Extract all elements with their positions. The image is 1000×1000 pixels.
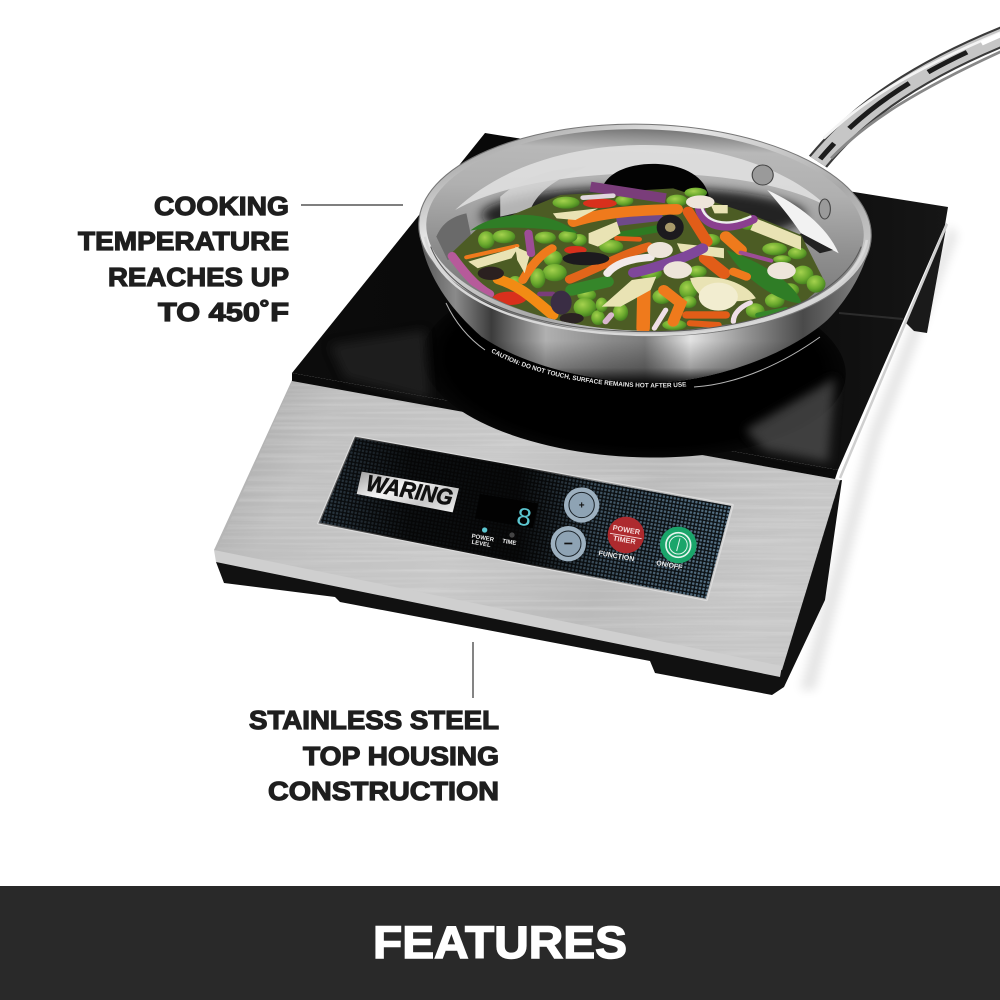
black base and feet bbox=[216, 480, 842, 695]
label: cooking temperature bbox=[78, 191, 403, 327]
burner disk bbox=[417, 262, 851, 468]
purple onion back bbox=[590, 187, 666, 198]
purple onion strips bbox=[452, 196, 771, 328]
display: 8 bbox=[514, 502, 534, 535]
orange strips bbox=[466, 209, 747, 328]
mushrooms bbox=[647, 195, 796, 279]
footer title: FEATURES bbox=[373, 917, 627, 968]
rivets bbox=[752, 165, 830, 219]
pale yellow vegetables bbox=[468, 205, 801, 311]
olives bbox=[478, 215, 684, 324]
glass front edge bbox=[292, 373, 838, 479]
label: stainless steel: CONSTRUCTION bbox=[268, 776, 499, 806]
induction cooktop bbox=[210, 133, 958, 695]
frying pan with vegetables bbox=[415, 25, 1000, 383]
red pepper bbox=[493, 199, 617, 305]
glass seam bbox=[839, 313, 903, 319]
panel plate bbox=[318, 437, 733, 600]
plus button bbox=[564, 487, 599, 523]
label: stainless steel: STAINLESS STEEL bbox=[249, 705, 499, 735]
soft shadow bbox=[800, 225, 958, 690]
footer banner bbox=[0, 886, 1000, 1000]
on off label: ON/OFF bbox=[656, 560, 684, 572]
stainless steel top bbox=[214, 380, 840, 670]
caution text: CAUTION: DO NOT TOUCH, SURFACE REMAINS HOT AFTER USE bbox=[492, 349, 686, 388]
power timer button: POWER bbox=[612, 523, 642, 537]
label: cooking temperature: REACHES UP bbox=[108, 262, 289, 292]
label: cooking temperature: COOKING bbox=[154, 191, 289, 221]
display bbox=[475, 494, 538, 535]
indicator labels bbox=[471, 534, 517, 549]
reflection on glass right bbox=[745, 378, 835, 462]
label: cooking temperature: TEMPERATURE bbox=[78, 226, 289, 256]
indicator labels: LEVEL bbox=[471, 540, 491, 549]
inner wall bbox=[422, 123, 868, 337]
power timer button: TIMER bbox=[612, 533, 637, 546]
Waring logo: WARING bbox=[364, 470, 455, 510]
indicator labels: POWER bbox=[471, 534, 495, 544]
leader line bbox=[472, 642, 474, 698]
label: stainless steel bbox=[249, 642, 499, 806]
green beans bbox=[572, 228, 786, 315]
steel front lip bbox=[214, 550, 782, 677]
power timer button bbox=[608, 517, 644, 553]
vegetables bbox=[449, 187, 825, 332]
panel darkening bbox=[318, 437, 733, 600]
label: stainless steel: TOP HOUSING bbox=[303, 741, 499, 771]
purple strip bbox=[617, 217, 663, 222]
pan rim bbox=[415, 117, 875, 343]
rear foot bbox=[905, 223, 947, 333]
burner ring lines bbox=[446, 303, 820, 387]
chrome side strip bbox=[840, 224, 947, 478]
label: cooking temperature: TO 450˚F bbox=[158, 297, 289, 327]
pan body shading bbox=[419, 233, 871, 383]
glass top bbox=[292, 133, 948, 470]
edamame bbox=[478, 188, 825, 330]
minus button bbox=[551, 526, 586, 561]
pea pod right bbox=[727, 250, 802, 303]
plus button: + bbox=[579, 500, 585, 511]
indicator labels: TIME bbox=[502, 539, 517, 547]
indicator lights bbox=[482, 527, 515, 538]
front rim highlight bbox=[425, 237, 867, 335]
pea pod left bbox=[470, 215, 578, 233]
brushed texture bbox=[239, 398, 840, 656]
food base bbox=[449, 188, 825, 332]
pan body bbox=[419, 233, 871, 383]
pan handle bbox=[818, 25, 1000, 162]
inner reflections bbox=[436, 145, 839, 260]
control panel bbox=[318, 437, 733, 600]
function label: FUNCTION bbox=[598, 550, 635, 563]
on off button bbox=[660, 527, 697, 563]
reflection on glass left bbox=[330, 330, 430, 400]
front rim shadow bbox=[431, 247, 861, 332]
leader line bbox=[301, 204, 403, 206]
